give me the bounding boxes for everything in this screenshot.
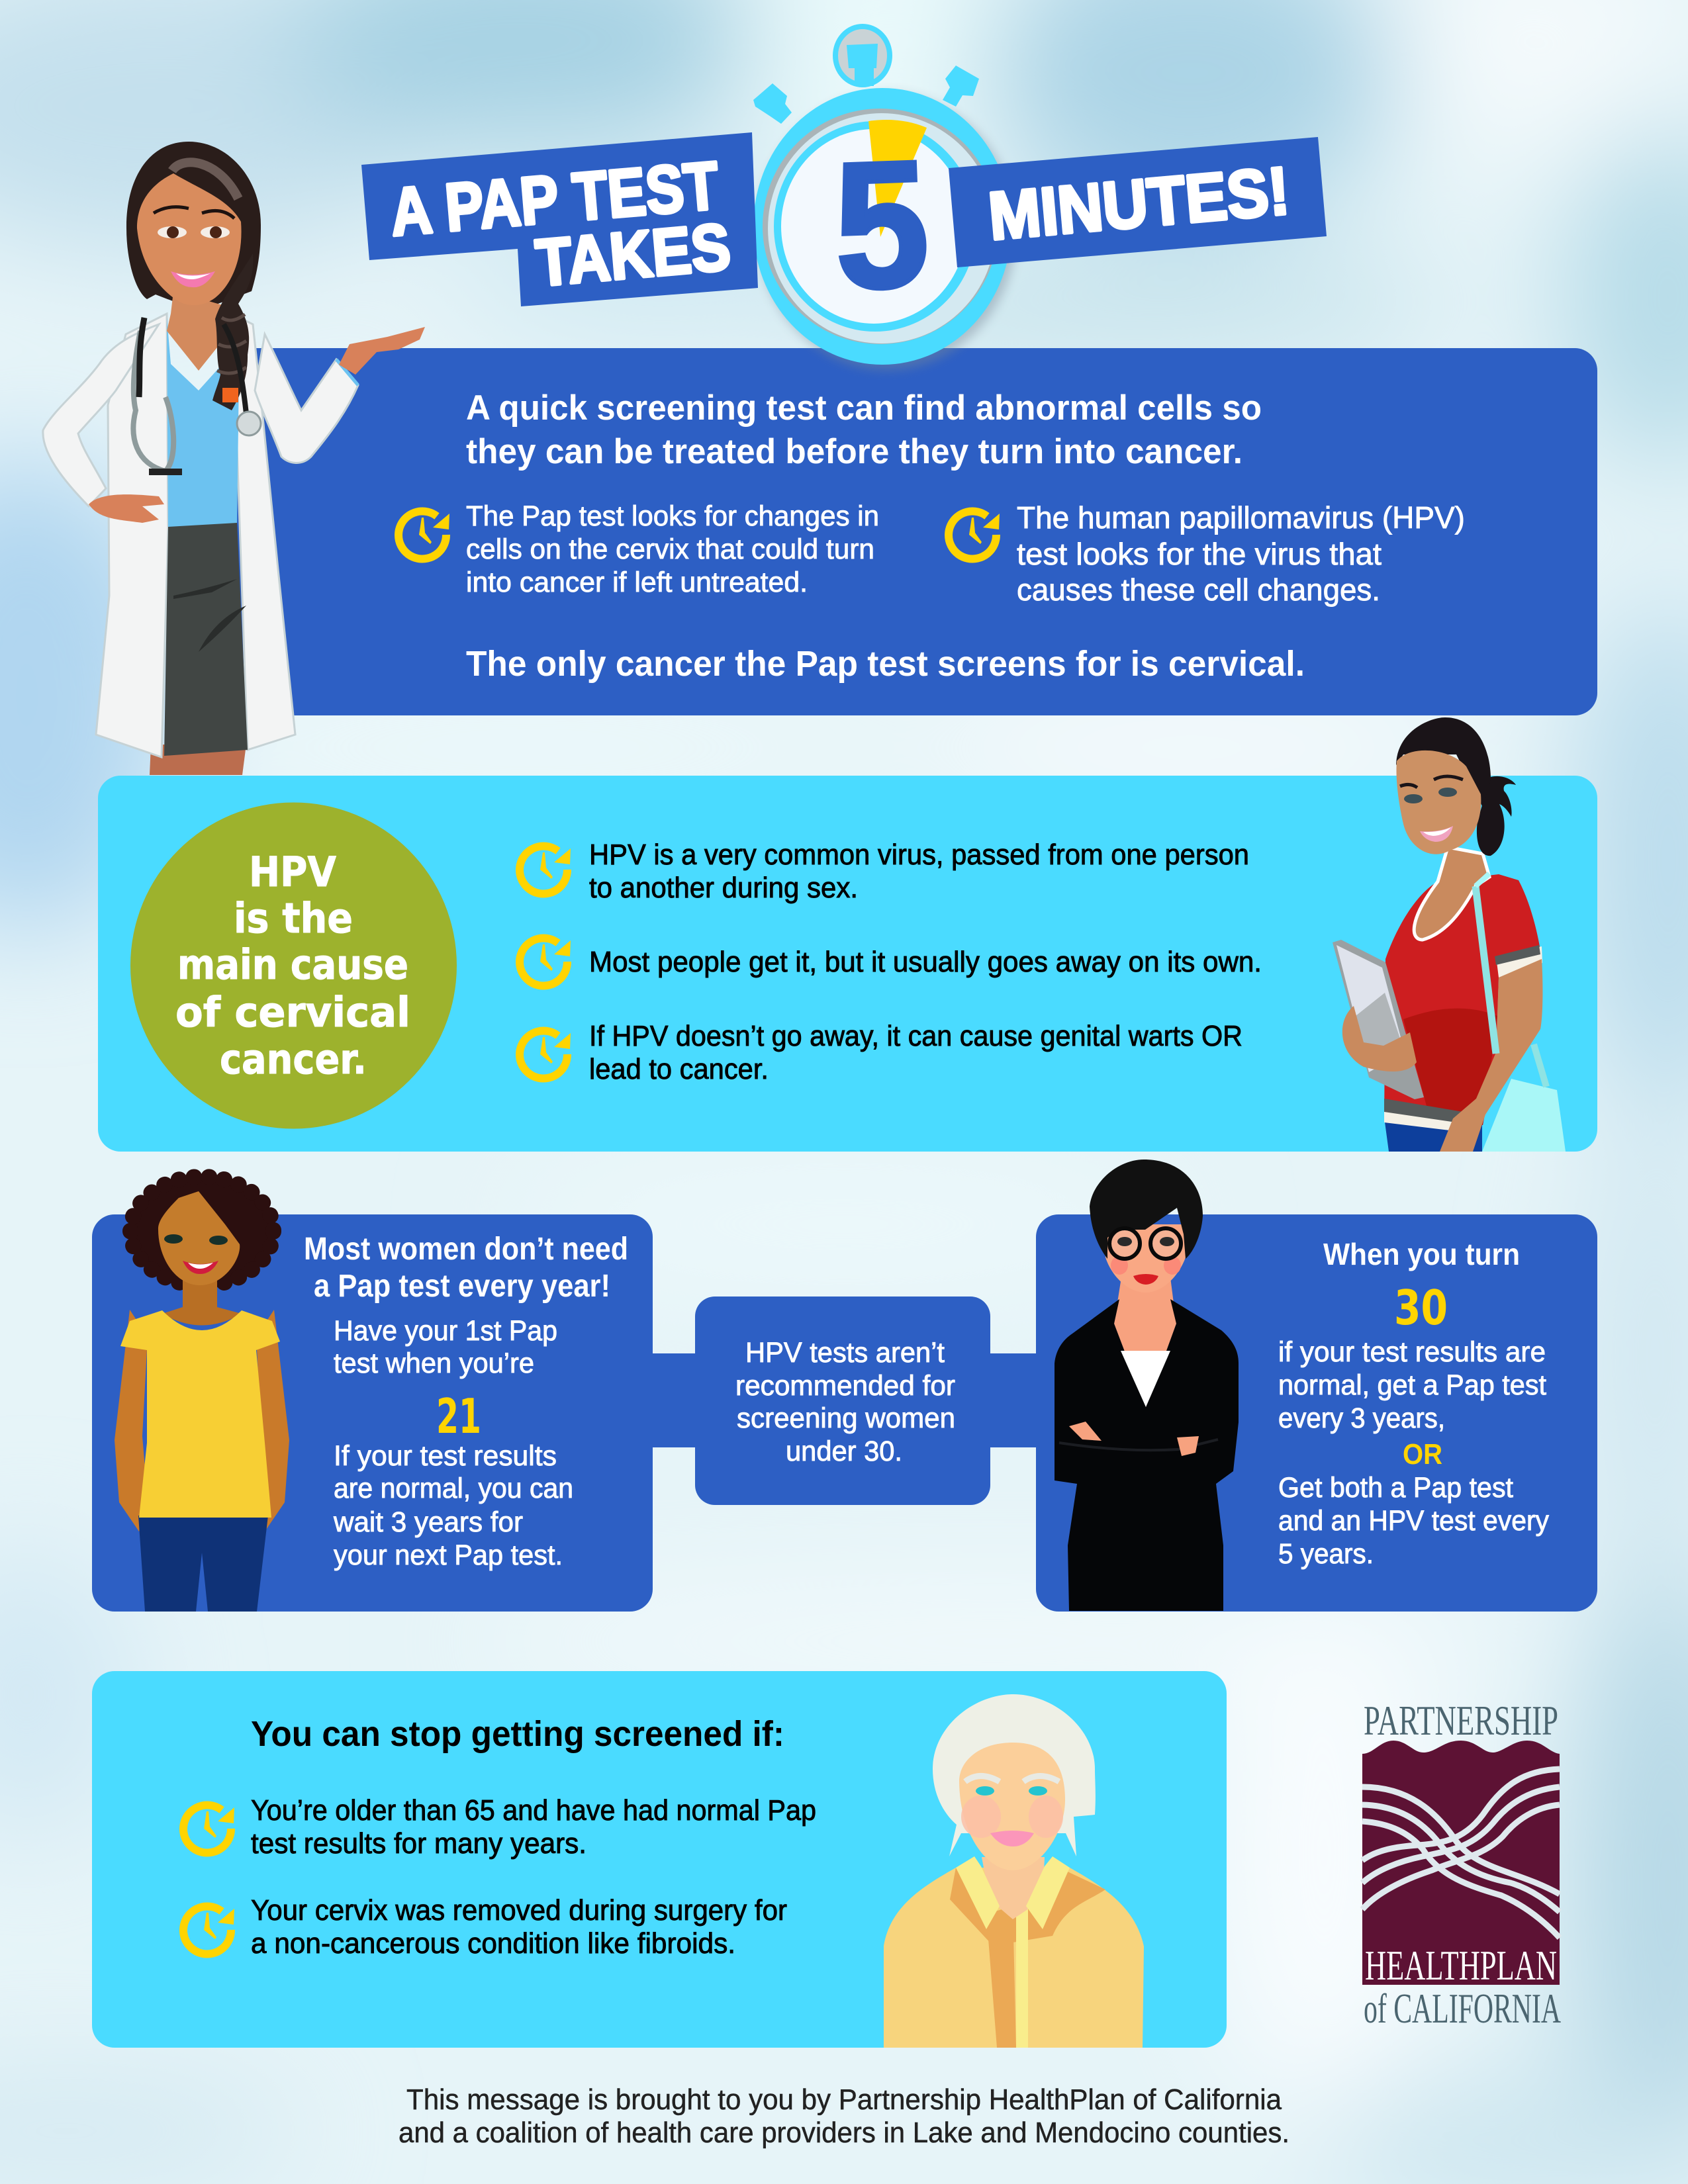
icon: clock bbox=[399, 511, 449, 559]
panel: when you turn 30 bbox=[1036, 1214, 1597, 1612]
panel: stop getting screened bbox=[92, 1671, 1227, 2048]
badge: HPV main cause: is the bbox=[234, 894, 353, 942]
panel: HPV main cause bbox=[98, 776, 1597, 1152]
badge: HPV main cause: main cause bbox=[177, 940, 408, 989]
footer message: and a coalition of health care providers in Lake and Mendocino counties. bbox=[399, 2116, 1289, 2149]
title banner: a pap test takes bbox=[361, 132, 758, 306]
logo: Partnership HealthPlan of California: of CALIFORNIA bbox=[1364, 1985, 1561, 2032]
text: pap test description: into cancer if left untreated. bbox=[466, 567, 808, 598]
text: stop getting screened: You’re older than 65 and have had normal Pap bbox=[251, 1794, 816, 1827]
connector and center panel: HPV tests: recommended for bbox=[735, 1370, 955, 1402]
panel: most women bbox=[92, 1214, 653, 1612]
text: when you turn 30: Get both a Pap test bbox=[1278, 1472, 1513, 1504]
text: stop getting screened: a non-cancerous condition like fibroids. bbox=[251, 1927, 735, 1960]
character: student bbox=[1333, 717, 1566, 1152]
stopwatch bbox=[753, 26, 1016, 370]
text: most women don't need: a Pap test every year! bbox=[314, 1269, 610, 1304]
panel 1 heading: they can be treated before they turn into cancer. bbox=[466, 432, 1243, 471]
list: HPV facts: to another during sex. bbox=[589, 872, 858, 904]
logo: Partnership HealthPlan of California bbox=[1362, 1697, 1561, 2032]
text: when you turn 30: if your test results are bbox=[1278, 1336, 1546, 1368]
text: most women don't need: Most women don’t need bbox=[304, 1232, 628, 1267]
connector and center panel: HPV tests: screening women bbox=[737, 1402, 955, 1434]
text: when you turn 30: 5 years. bbox=[1278, 1538, 1374, 1570]
logo: Partnership HealthPlan of California: PARTNERSHIP bbox=[1364, 1697, 1558, 1744]
badge: HPV main cause bbox=[130, 802, 457, 1129]
icon: clock bbox=[949, 511, 1000, 559]
connector and center panel: HPV tests: HPV tests aren’t bbox=[745, 1337, 945, 1369]
text: when you turn 30: When you turn bbox=[1323, 1237, 1520, 1271]
badge: HPV main cause: HPV bbox=[249, 848, 336, 896]
text: when you turn 30: normal, get a Pap test bbox=[1278, 1369, 1546, 1401]
text: stop getting screened: Your cervix was removed during surgery for bbox=[251, 1894, 787, 1927]
text: when you turn 30: every 3 years, bbox=[1278, 1402, 1445, 1434]
panel: quick screening test bbox=[232, 348, 1597, 715]
text: when you turn 30 bbox=[1278, 1237, 1549, 1570]
panel 1 heading bbox=[466, 388, 1262, 471]
list: HPV facts bbox=[520, 839, 1262, 1085]
text: stop getting screened: You can stop getting screened if: bbox=[251, 1714, 784, 1754]
badge: HPV main cause: cancer. bbox=[220, 1035, 367, 1083]
title banner: minutes: MINUTES! bbox=[986, 153, 1292, 254]
text: most women don't need: 21 bbox=[436, 1388, 481, 1444]
text: most women don't need: Have your 1st Pap bbox=[334, 1315, 557, 1347]
text: HPV test description: causes these cell changes. bbox=[1017, 572, 1380, 607]
list: HPV facts: If HPV doesn’t go away, it can cause genital warts OR bbox=[589, 1020, 1243, 1052]
footer message: This message is brought to you by Partnership HealthPlan of California bbox=[406, 2083, 1282, 2116]
text: most women don't need: If your test results bbox=[334, 1440, 557, 1472]
badge: HPV main cause: of cervical bbox=[175, 988, 410, 1036]
list: HPV facts: HPV is a very common virus, passed from one person bbox=[589, 839, 1249, 871]
text: most women don't need bbox=[304, 1232, 628, 1571]
text: most women don't need: your next Pap test. bbox=[334, 1539, 563, 1571]
stopwatch: 5 bbox=[831, 122, 932, 327]
text: most women don't need: test when you’re bbox=[334, 1347, 534, 1379]
text: HPV test description: test looks for the virus that bbox=[1017, 537, 1382, 571]
text: when you turn 30: and an HPV test every bbox=[1278, 1505, 1549, 1537]
title banner: a pap test takes: A PAP TEST bbox=[387, 148, 722, 250]
text: pap test description: The Pap test looks for changes in bbox=[466, 500, 879, 532]
character: doctor bbox=[43, 142, 425, 775]
title banner: minutes bbox=[949, 137, 1327, 267]
text: stop getting screened: test results for many years. bbox=[251, 1827, 586, 1860]
character: older woman bbox=[884, 1694, 1144, 2048]
list: HPV facts: Most people get it, but it usually goes away on its own. bbox=[589, 946, 1262, 978]
text: pap test description bbox=[466, 500, 879, 598]
title banner: a pap test takes: TAKES bbox=[533, 210, 733, 300]
text: when you turn 30: 30 bbox=[1394, 1280, 1448, 1336]
list: HPV facts: lead to cancer. bbox=[589, 1053, 769, 1085]
text: most women don't need: are normal, you can bbox=[334, 1473, 573, 1504]
logo: Partnership HealthPlan of California: HEALTHPLAN bbox=[1365, 1942, 1557, 1989]
character: curly hair woman bbox=[115, 1177, 289, 1612]
footer message bbox=[399, 2083, 1289, 2149]
character: woman with glasses bbox=[1055, 1160, 1239, 1611]
text: HPV test description bbox=[1017, 500, 1465, 607]
text: only cancer statement: The only cancer the Pap test screens for is cervical. bbox=[466, 644, 1305, 684]
connector and center panel: HPV tests bbox=[649, 1297, 1046, 1505]
panel 1 heading: A quick screening test can find abnormal cells so bbox=[466, 388, 1262, 428]
text: HPV test description: The human papillomavirus (HPV) bbox=[1017, 500, 1465, 535]
text: pap test description: cells on the cervix that could turn bbox=[466, 533, 874, 565]
text: when you turn 30: OR bbox=[1403, 1438, 1442, 1471]
text: most women don't need: wait 3 years for bbox=[333, 1506, 523, 1538]
text: stop getting screened bbox=[183, 1714, 816, 1960]
connector and center panel: HPV tests: under 30. bbox=[786, 1435, 902, 1467]
